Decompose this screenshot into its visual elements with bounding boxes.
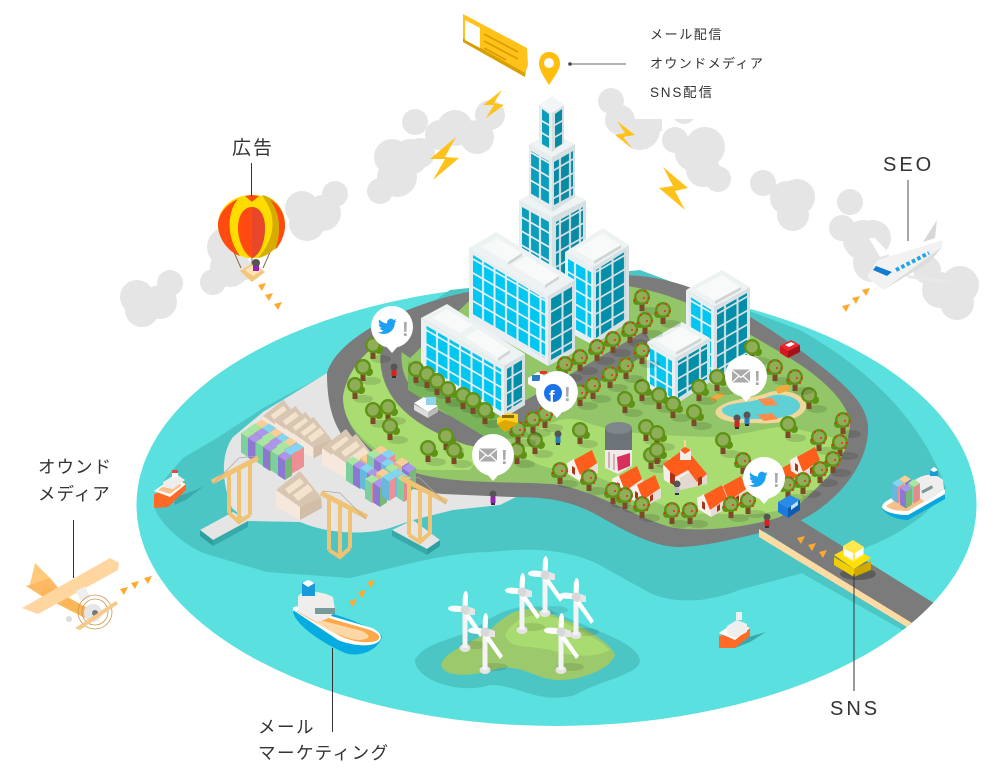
bubble: facebook: f xyxy=(549,387,555,406)
label list: delivery channels: メール配信 xyxy=(650,27,723,42)
balloon: advertising xyxy=(218,195,285,282)
building: right lower xyxy=(647,322,710,405)
label: owned media: メディア xyxy=(38,484,111,504)
blue bus xyxy=(778,495,800,518)
white truck xyxy=(414,397,438,418)
wind farm islet xyxy=(415,556,640,698)
bubble: facebook: ! xyxy=(564,384,571,406)
ship: mail marketing vessel xyxy=(293,580,382,655)
orchard trees xyxy=(509,289,861,478)
label: ad: 広告 xyxy=(232,137,274,159)
bubble: mail right: ! xyxy=(754,368,761,390)
village houses xyxy=(567,440,821,517)
red car xyxy=(780,340,800,358)
label list: delivery channels xyxy=(650,27,764,100)
boat: small red right xyxy=(719,612,766,648)
school bus xyxy=(497,413,518,432)
arrows: dotted signals xyxy=(120,283,870,607)
cranes xyxy=(212,456,447,557)
clouds xyxy=(120,88,979,327)
turbines xyxy=(448,556,599,674)
building: right of main block xyxy=(565,228,629,345)
leader lines xyxy=(74,64,908,732)
port quay xyxy=(200,370,520,555)
pond xyxy=(710,384,806,423)
building: right tall xyxy=(686,270,750,385)
label: mail marketing: メール xyxy=(258,717,315,737)
label: owned media xyxy=(38,457,112,504)
yellow taxi car xyxy=(834,540,876,580)
plane: SEO airliner xyxy=(867,220,950,290)
bubble: twitter right: ! xyxy=(773,470,780,492)
building: low left block xyxy=(408,304,535,440)
island green xyxy=(343,285,850,529)
lightning bolts xyxy=(430,90,688,210)
boat: small red left xyxy=(154,470,204,508)
inner road xyxy=(391,340,650,436)
warehouses xyxy=(263,400,378,520)
building: main block xyxy=(469,232,575,366)
church xyxy=(663,440,707,490)
label: SNS: SNS xyxy=(830,698,880,720)
label: mail marketing xyxy=(258,717,390,763)
sea: circular water disc xyxy=(136,284,976,726)
icon: location pin xyxy=(539,52,560,85)
bubble: twitter top-left: ! xyxy=(402,319,409,341)
pin leader dot xyxy=(568,62,572,66)
people xyxy=(390,364,770,528)
orchard trees front row xyxy=(551,461,838,528)
silo xyxy=(605,422,632,474)
bubble: facebook xyxy=(536,371,578,418)
boat: container ship right xyxy=(882,467,945,520)
label: owned media: オウンド xyxy=(38,457,112,477)
bubble: mail right xyxy=(725,355,767,402)
container stacks xyxy=(241,420,416,507)
label list: delivery channels: SNS配信 xyxy=(650,85,714,100)
bubble: mail centre xyxy=(472,434,514,481)
island road ring xyxy=(327,275,868,547)
label: SEO: SEO xyxy=(883,154,934,176)
bubble: twitter top-left xyxy=(371,306,413,353)
bubble: twitter right xyxy=(743,457,785,504)
shallow darker water around the island xyxy=(155,270,946,600)
police car xyxy=(528,371,548,391)
vehicles on island xyxy=(414,340,876,580)
tower xyxy=(519,96,586,300)
bubble: mail centre: ! xyxy=(501,447,508,469)
green trees xyxy=(347,337,827,473)
label: mail marketing: マーケティング xyxy=(258,743,390,763)
label list: delivery channels: オウンドメディア xyxy=(650,56,764,71)
icon: mail card xyxy=(463,14,528,77)
bridge to mainland xyxy=(759,520,934,630)
plane: outbound media xyxy=(22,558,119,630)
